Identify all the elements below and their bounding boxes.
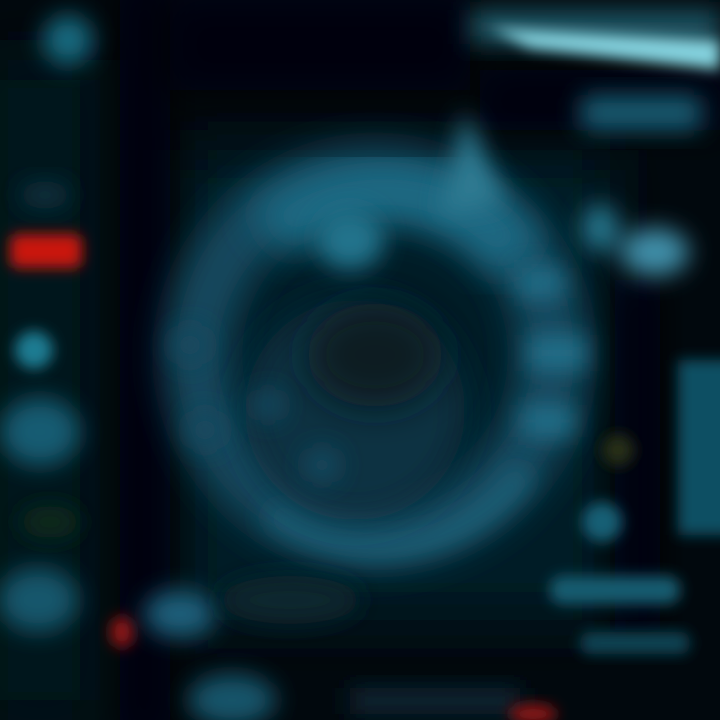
left small glow — [19, 181, 71, 209]
top right bright bar — [490, 28, 720, 70]
bottom dome — [188, 674, 276, 720]
bottom grey smudge — [220, 576, 360, 624]
dial inner details — [170, 210, 384, 483]
bottom blue blob — [144, 590, 216, 638]
left large button — [0, 398, 80, 466]
dim green light — [20, 506, 80, 538]
dim olive light — [602, 434, 634, 466]
icon: top left circle — [43, 15, 93, 65]
dial outer ring — [197, 177, 553, 533]
dial upper bright arc — [270, 191, 520, 260]
dial inner mid tone — [245, 300, 465, 520]
bottom bar — [350, 688, 520, 714]
top right haze — [470, 10, 720, 44]
small red light — [110, 616, 134, 648]
right lower bar — [550, 576, 680, 604]
panel: right column — [470, 10, 720, 654]
right bottom bar — [580, 632, 690, 654]
panel: central circular dial — [170, 110, 586, 546]
bottom red light — [509, 704, 557, 720]
dial hub — [307, 303, 443, 407]
red alert bar — [10, 234, 82, 268]
right tall panel — [678, 360, 720, 535]
lower left button — [0, 568, 78, 632]
panel: left column — [0, 15, 134, 648]
dial lower arc — [270, 470, 525, 546]
panel: bottom cluster — [144, 576, 557, 720]
right dot — [582, 502, 622, 542]
dial spike — [440, 110, 505, 215]
right cloud — [582, 204, 689, 276]
top right text block — [580, 95, 702, 131]
icon: teal dot — [15, 331, 53, 369]
dial right blocks — [518, 268, 586, 437]
